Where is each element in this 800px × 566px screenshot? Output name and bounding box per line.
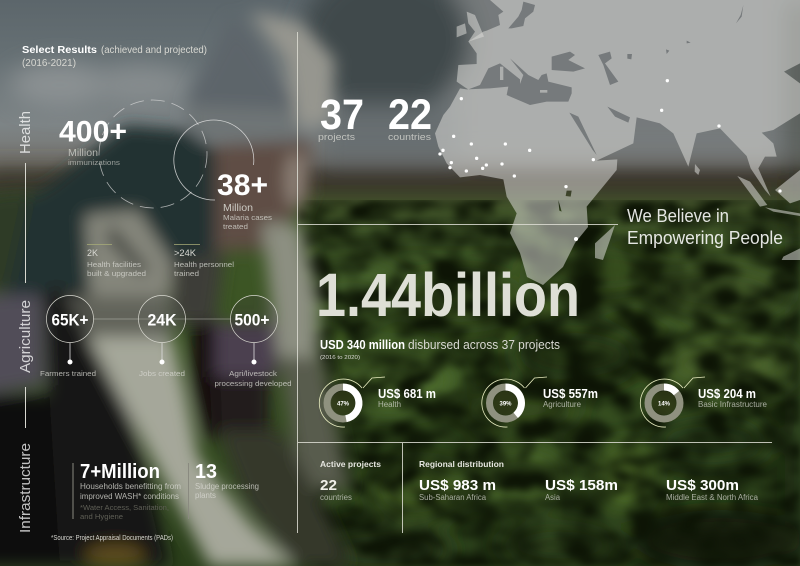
node: jobs created: Jobs created [139,369,185,378]
stat: 24K health personnel: Health personnel [174,260,234,269]
upper sky [10,63,110,107]
field mottling [298,200,800,566]
vest, striped upper [85,210,172,296]
stat: 38+ malaria: treated [223,222,248,231]
region: Middle East and North Africa: US$ 300m [666,477,739,494]
node: agri processing: 500+ [234,310,270,330]
stat: 400+ immunizations: Million [68,148,98,159]
donut: health [319,377,436,427]
stat: 24K health personnel [174,244,234,278]
section label: Infrastructure: Infrastructure [17,443,34,533]
donut: basic infrastructure: Basic Infrastructure [698,400,768,409]
node: agri processing [214,296,292,388]
Ireland [457,23,467,37]
stat: 7+ million households: 7+Million [80,461,160,483]
Borneo and islands [775,170,800,203]
active projects: Active projects [320,459,381,469]
active projects [320,459,381,502]
source note: *Source: Project Appraisal Documents (PADs) [51,533,173,542]
disbursement heading: disbursed across 37 projects [408,338,560,352]
stat: 38+ malaria: Malaria cases [223,213,272,222]
region: Sub-Saharan Africa [419,477,496,502]
region: Middle East and North Africa: Middle East & North Africa [666,493,759,502]
stat: 24K health personnel: >24K [174,248,197,259]
heading: select results: (2016-2021) [22,58,76,69]
donut: health: US$ 681 m [378,386,436,401]
map location dots [438,79,782,241]
region: Middle East and North Africa [666,477,759,502]
active projects: countries [320,493,352,502]
stat: 400+ immunizations [59,116,127,167]
stat: 37 projects: 37 [320,91,364,139]
disbursement heading: (2016 to 2020) [320,355,360,361]
section label: Health: Health [17,111,34,154]
stat: 400+ immunizations: immunizations [68,158,120,167]
donut: basic infrastructure: 14% [658,402,671,408]
node: agri processing: Agri/livestock [229,369,277,378]
stat: 7+ million households: and Hygiene [80,512,123,521]
Great Britain [467,12,484,42]
stat: 22 countries: 22 [388,91,432,139]
donut: basic infrastructure [640,377,768,427]
tagline: We Believe in [627,205,729,226]
node: jobs created [138,296,186,378]
node: farmers trained: 65K+ [52,310,89,330]
heading: select results: (achieved and projected) [101,45,207,56]
heading: select results [22,45,207,69]
stat: 2K health facilities: Health facilities [87,260,141,269]
stat: 37 projects: projects [318,132,356,142]
field patches [300,200,800,230]
Australia [782,248,800,260]
right vest [262,222,318,357]
stat: 2K health facilities [87,244,146,278]
health stats circles [99,100,254,208]
region: Sub-Saharan Africa: Sub-Saharan Africa [419,493,487,502]
donut: agriculture: US$ 557m [543,386,598,401]
stat: 7+ million households: *Water Access, Sanitation, [80,503,169,512]
donut: agriculture: Agriculture [543,400,582,409]
disbursement heading: USD 340 million [320,338,405,352]
node: farmers trained [40,296,96,378]
hat [185,15,300,135]
donut: health: Health [378,400,401,409]
face [213,140,310,250]
stat: 13 sludge plants [188,461,259,519]
stat: 24K health personnel: trained [174,269,199,278]
stat: 7+ million households: Households benefitting from [80,482,181,491]
active projects: 22 [320,477,337,494]
stat: 7+ million households [73,461,181,521]
node: jobs created: 24K [148,310,177,330]
stat: 13 sludge plants: plants [195,491,216,500]
node: agri processing: processing developed [214,379,292,388]
world map [435,0,800,285]
region: Asia: US$ 158m [545,477,618,494]
region: Asia [545,477,618,502]
regional distribution heading: Regional distribution [419,459,504,469]
vest, white diagonal [88,337,295,566]
jacket [5,125,215,295]
stat: 13 sludge plants: Sludge processing [195,482,259,491]
node: farmers trained: Farmers trained [40,369,96,378]
stat: 400+ immunizations: 400+ [59,116,127,148]
stat: 7+ million households: improved WASH* conditions [80,492,179,501]
donut: health: 47% [337,402,350,408]
donut: agriculture: 39% [499,402,512,408]
stat: 38+ malaria: 38+ [217,169,268,202]
donut: agriculture [482,377,598,427]
stat: 22 countries: countries [388,132,432,142]
stat: 2K health facilities: 2K [87,248,99,259]
agriculture connector [93,318,231,320]
big number: 1.44 billion: 1.44billion [316,261,580,329]
stat: 38+ malaria [217,169,272,231]
tagline: Empowering People [627,227,783,248]
Sardinia and Corsica [500,67,503,80]
frame lines [298,32,772,533]
disbursement heading [320,338,560,361]
donut: basic infrastructure: US$ 204 m [698,386,756,401]
stat: 2K health facilities: built & upgraded [87,269,146,278]
Sri Lanka [695,164,700,175]
heading: select results: Select Results [22,45,97,56]
tagline [627,205,783,248]
Crete [540,90,547,93]
region: Asia: Asia [545,493,561,502]
section label: Agriculture: Agriculture [17,300,34,373]
Madagascar [595,225,615,260]
stat: 13 sludge plants: 13 [195,461,217,483]
stat: 38+ malaria: Million [223,203,253,214]
Java [765,207,800,216]
Sumatra [737,176,767,207]
left dark [0,395,160,566]
region: Sub-Saharan Africa: US$ 983 m [419,477,496,494]
section label: Agriculture [17,300,34,428]
